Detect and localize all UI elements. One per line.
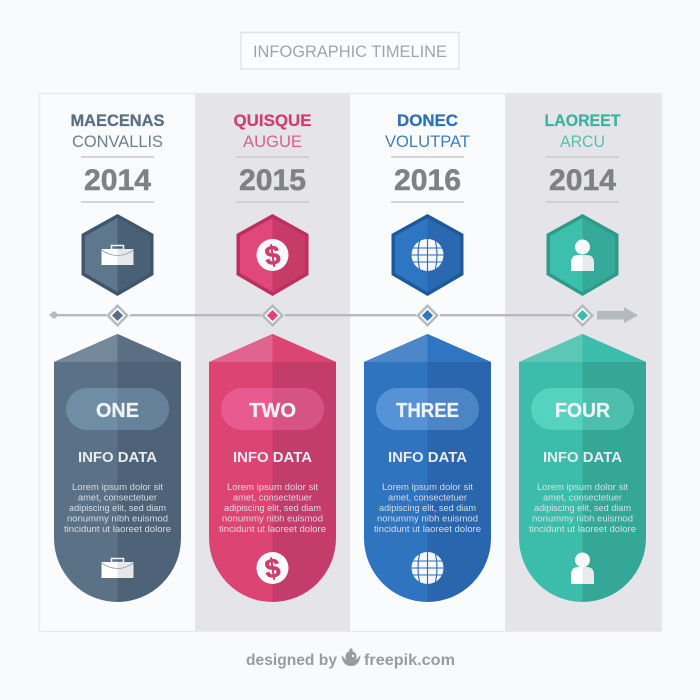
heading: quisque augue: AUGUE (243, 132, 302, 151)
body text: adipiscing elit, sed diam (379, 503, 476, 514)
heading: donec volutpat: VOLUTPAT (385, 132, 470, 151)
info heading: INFO DATA (78, 450, 158, 466)
body text: nonummy nibh euismod (532, 514, 633, 524)
year 2015 (236, 157, 309, 202)
heading: laoreet arcu: LAOREET (544, 111, 621, 130)
info heading: INFO DATA (388, 450, 468, 466)
heading: donec volutpat (385, 111, 470, 151)
year 2014: 2014 (549, 164, 616, 197)
body text (374, 482, 481, 535)
heading: maecenas convallis: MAECENAS (70, 111, 164, 130)
timeline marker (416, 304, 439, 327)
shield card (364, 334, 491, 602)
body text: Lorem ipsum dolor sit (537, 482, 628, 493)
icon: briefcase (102, 558, 134, 578)
timeline marker (106, 304, 129, 327)
year 2015: 2015 (239, 164, 306, 197)
icon: person (571, 552, 594, 584)
year 2014: 2014 (84, 164, 151, 197)
body text: Lorem ipsum dolor sit (72, 482, 163, 493)
column four (519, 111, 646, 602)
body text: tincidunt ut laoreet dolore (64, 524, 171, 535)
shield card (209, 334, 336, 602)
timeline marker (571, 304, 594, 327)
hexagon icon: briefcase (82, 214, 154, 296)
footer credit: freepik.com (364, 652, 455, 669)
pill label (221, 388, 324, 430)
hexagon icon: dollar (236, 214, 308, 296)
footer credit (246, 648, 455, 669)
title box (241, 32, 459, 69)
body text: tincidunt ut laoreet dolore (219, 524, 326, 535)
body text: amet, consectetuer (78, 492, 157, 504)
heading: laoreet arcu: ARCU (560, 132, 605, 151)
timeline axis (49, 307, 638, 323)
pill label: FOUR (555, 399, 610, 422)
hexagon icon: person (546, 214, 618, 296)
heading: quisque augue (234, 111, 312, 151)
pill label (376, 388, 479, 430)
year 2016: 2016 (394, 164, 461, 197)
main panel background (40, 94, 662, 632)
pill label (531, 388, 634, 430)
body text: adipiscing elit, sed diam (534, 503, 631, 514)
year 2014 (81, 157, 154, 202)
hexagon icon: dollar: $ (263, 240, 282, 271)
info heading: INFO DATA (543, 450, 623, 466)
column two (209, 111, 336, 602)
shield card (519, 334, 646, 602)
body text: amet, consectetuer (388, 492, 467, 504)
icon: dollar (256, 552, 288, 584)
title box: INFOGRAPHIC TIMELINE (253, 43, 447, 61)
footer credit: designed by (246, 652, 337, 669)
hexagon icon: globe (392, 214, 464, 296)
body text: adipiscing elit, sed diam (69, 503, 166, 514)
timeline marker (261, 304, 284, 327)
column three (364, 111, 491, 602)
body text: nonummy nibh euismod (67, 514, 168, 524)
heading: donec volutpat: DONEC (397, 111, 458, 130)
body text (529, 482, 636, 535)
body text: amet, consectetuer (543, 492, 622, 504)
body text: tincidunt ut laoreet dolore (529, 524, 636, 535)
body text: tincidunt ut laoreet dolore (374, 524, 481, 535)
heading: maecenas convallis (70, 111, 164, 151)
year 2014 (546, 157, 619, 202)
column one (54, 111, 181, 602)
body text: amet, consectetuer (233, 492, 312, 504)
pill label: ONE (96, 399, 139, 422)
body text (219, 482, 326, 535)
heading: laoreet arcu (544, 111, 621, 151)
heading: maecenas convallis: CONVALLIS (72, 132, 163, 151)
pill label: TWO (249, 399, 296, 422)
body text: Lorem ipsum dolor sit (227, 482, 318, 493)
shield card (54, 334, 181, 602)
heading: quisque augue: QUISQUE (234, 111, 312, 130)
body text: nonummy nibh euismod (377, 514, 478, 524)
info heading: INFO DATA (233, 450, 313, 466)
icon: freepik logo (342, 648, 360, 666)
body text: nonummy nibh euismod (222, 514, 323, 524)
body text (64, 482, 171, 535)
pill label (66, 388, 169, 430)
icon: dollar: $ (263, 553, 282, 584)
body text: Lorem ipsum dolor sit (382, 482, 473, 493)
body text: adipiscing elit, sed diam (224, 503, 321, 514)
icon: globe (412, 552, 444, 584)
pill label: THREE (396, 399, 459, 422)
year 2016 (391, 157, 464, 202)
